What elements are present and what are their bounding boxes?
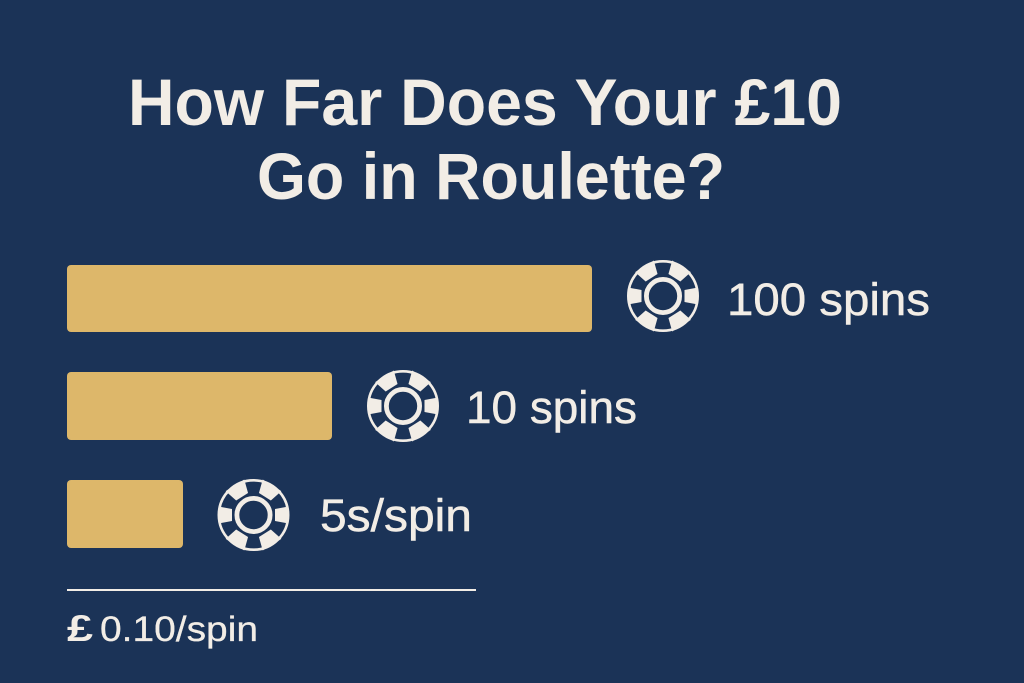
bar row: 5s/spin xyxy=(67,479,472,551)
title: Go in Roulette? xyxy=(257,139,725,213)
label: 5s/spin: 5s/spin xyxy=(320,490,472,541)
title: How Far Does Your £10 xyxy=(128,65,842,139)
icon: casino chip xyxy=(218,479,288,551)
title xyxy=(128,65,842,213)
bar row: 10 spins xyxy=(67,370,637,442)
bar row: 100 spins xyxy=(67,260,930,332)
bar: 100 spins xyxy=(67,265,592,332)
icon: casino chip xyxy=(628,260,698,332)
label: 100 spins: 100 spins xyxy=(727,274,930,325)
footer: cost per spin: 0.10/spin xyxy=(100,610,258,649)
footer: cost per spin: £ xyxy=(67,608,94,649)
bar: 10 spins xyxy=(67,372,332,440)
icon: casino chip xyxy=(368,370,438,442)
bar: 5s/spin xyxy=(67,480,183,548)
label: 10 spins: 10 spins xyxy=(466,382,637,433)
